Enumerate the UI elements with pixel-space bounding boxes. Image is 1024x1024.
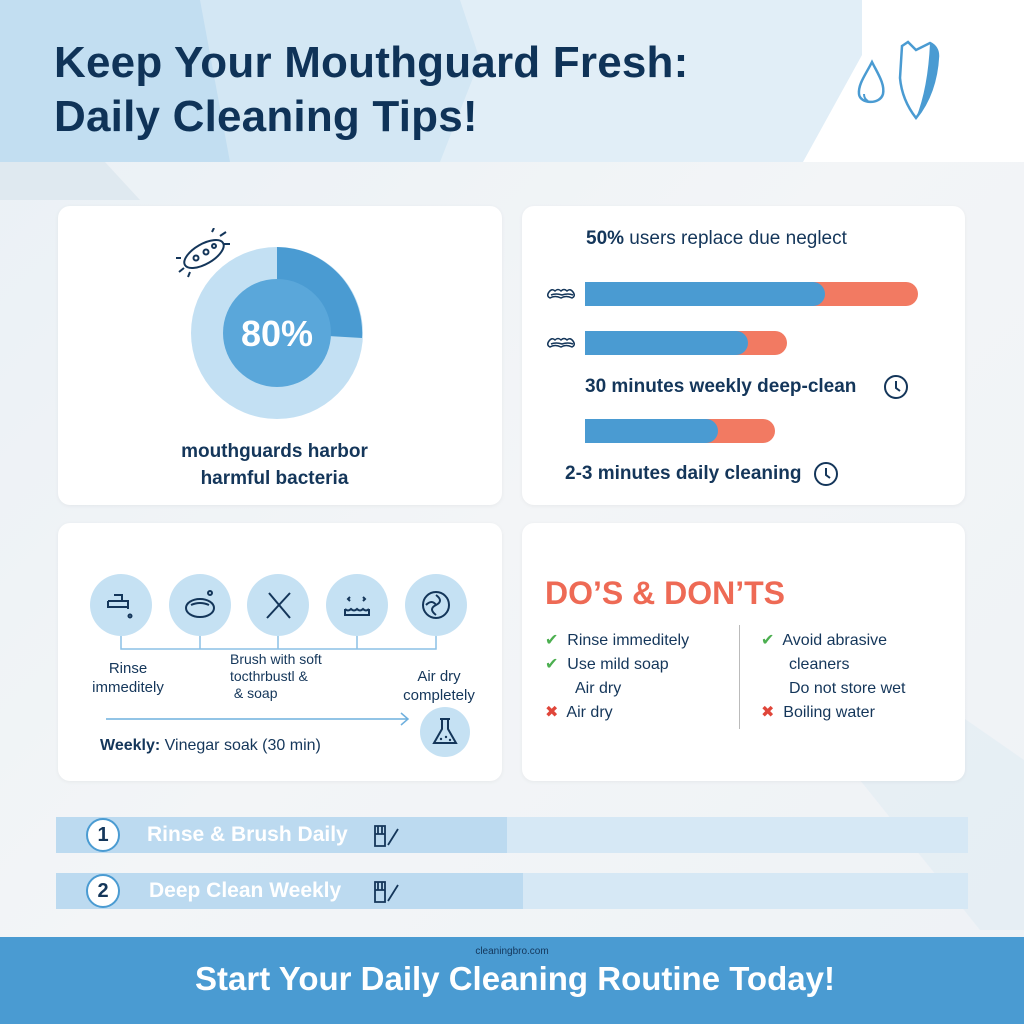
step label: rinse (92, 660, 164, 696)
divider line (739, 625, 740, 729)
footer banner (0, 937, 1024, 1024)
weekly note: Weekly: Vinegar soak (30 min) (100, 737, 321, 754)
left column: ✖ Air dry (545, 704, 613, 721)
step icons row (90, 574, 467, 650)
step banner 2: 2 (97, 880, 109, 902)
donut chart 80%: 80% (241, 313, 313, 354)
footer banner: Start Your Daily Cleaning Routine Today! (195, 960, 835, 997)
bar 3 (585, 419, 775, 443)
title (54, 38, 688, 141)
step banner 1 (56, 817, 968, 853)
icon: bacteria (176, 228, 230, 278)
donut chart 80% (191, 247, 363, 419)
panel: bar chart stats (522, 206, 965, 505)
left column: ✔ Use mild soap (545, 656, 669, 673)
panel: dos and donts (522, 523, 965, 781)
step banner 1: 1 (97, 824, 109, 846)
bar 1 (547, 282, 918, 306)
title: Daily Cleaning Tips! (54, 92, 478, 141)
icon: clock (814, 462, 838, 486)
icon: toothbrush (374, 881, 399, 903)
left column: ✔ Rinse immeditely (545, 632, 689, 649)
panel: cleaning steps (58, 523, 502, 781)
step label: air dry: completely (403, 687, 475, 704)
step label: rinse: immeditely (92, 679, 164, 696)
right column (761, 632, 906, 721)
right column: ✖ Boiling water (761, 704, 875, 721)
step label: rinse: Rinse (109, 660, 147, 677)
left column: Air dry (575, 680, 621, 697)
right column: Do not store wet (789, 680, 906, 697)
icon: clock (884, 375, 908, 399)
caption: mouthguards harbor (181, 441, 368, 462)
icon: water drop and shield (858, 40, 940, 120)
arrow (106, 712, 409, 726)
step label: brush: & soap (234, 685, 277, 701)
icon: toothbrush (374, 825, 399, 847)
caption: harmful bacteria (201, 468, 348, 489)
footer banner: cleaningbro.com (475, 946, 549, 957)
step label: brush: tocthrbustl & (230, 668, 308, 684)
step label: brush (230, 651, 322, 701)
heading: 50% users replace due neglect (586, 228, 847, 249)
title: Keep Your Mouthguard Fresh: (54, 38, 688, 87)
label weekly: 30 minutes weekly deep-clean (585, 376, 856, 397)
step label: air dry: Air dry (417, 668, 461, 685)
step label: air dry (403, 668, 475, 704)
label daily: 2-3 minutes daily cleaning (565, 463, 802, 484)
step label: brush: Brush with soft (230, 651, 322, 667)
heading: DO’S & DON’TS (545, 575, 785, 611)
left column (545, 632, 690, 721)
step banner 1: Rinse & Brush Daily (147, 823, 348, 846)
bar 2 (547, 331, 787, 355)
step banner 2: Deep Clean Weekly (149, 879, 341, 902)
step banner 2 (56, 873, 968, 909)
panel: bacteria stat (58, 206, 502, 505)
right column: ✔ Avoid abrasive (761, 632, 887, 649)
right column: cleaners (789, 656, 849, 673)
caption (181, 441, 368, 489)
icon: flask (420, 707, 470, 757)
